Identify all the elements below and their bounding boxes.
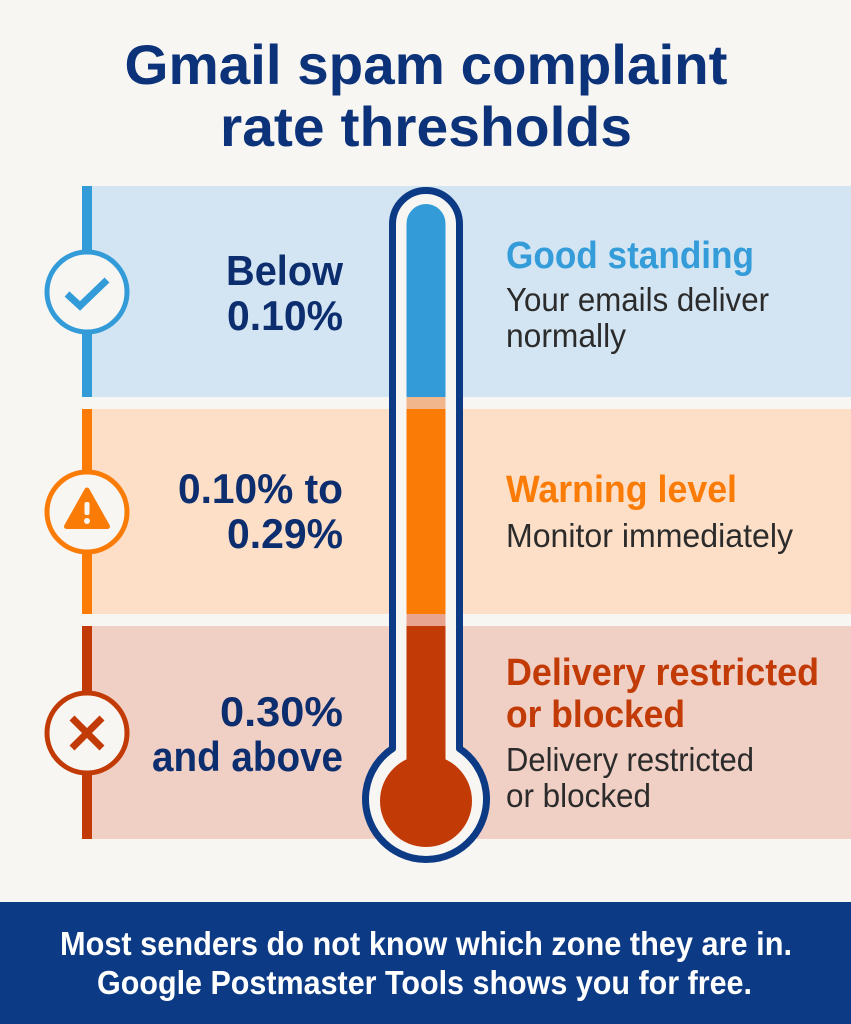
footer banner: Google Postmaster Tools shows you for free. — [97, 964, 752, 1001]
threshold: below 0.10%: 0.10% — [227, 292, 343, 339]
description: good standing: normally — [506, 317, 626, 354]
thermometer — [365, 190, 486, 859]
threshold: 0.10% to 0.29%: 0.10% to — [178, 465, 343, 512]
icon: cross — [47, 693, 127, 773]
threshold: below 0.10%: Below — [226, 247, 343, 294]
description: good standing: Your emails deliver — [506, 281, 769, 318]
description: delivery restricted or blocked: Delivery restricted — [506, 741, 754, 778]
title: rate thresholds — [220, 95, 632, 158]
status: warning level: Warning level — [506, 469, 737, 511]
description: warning level: Monitor immediately — [506, 517, 793, 554]
threshold: 0.30% and above: and above — [152, 733, 343, 780]
title: Gmail spam complaint — [124, 33, 728, 96]
status: good standing: Good standing — [506, 235, 754, 277]
icon: warning triangle — [47, 472, 127, 552]
panel: delivery restricted — [47, 626, 851, 839]
status: delivery restricted or blocked: or blocked — [506, 694, 685, 736]
panel: warning level — [47, 409, 851, 614]
footer banner — [0, 902, 851, 1024]
status: delivery restricted or blocked: Delivery restricted — [506, 652, 819, 694]
threshold: 0.30% and above: 0.30% — [220, 688, 343, 735]
title — [124, 33, 728, 158]
footer banner: Most senders do not know which zone they are in. — [60, 925, 792, 962]
icon: check mark — [47, 252, 127, 332]
panel: good standing — [47, 186, 851, 397]
description: delivery restricted or blocked: or blocked — [506, 777, 651, 814]
threshold: 0.10% to 0.29%: 0.29% — [227, 510, 343, 557]
